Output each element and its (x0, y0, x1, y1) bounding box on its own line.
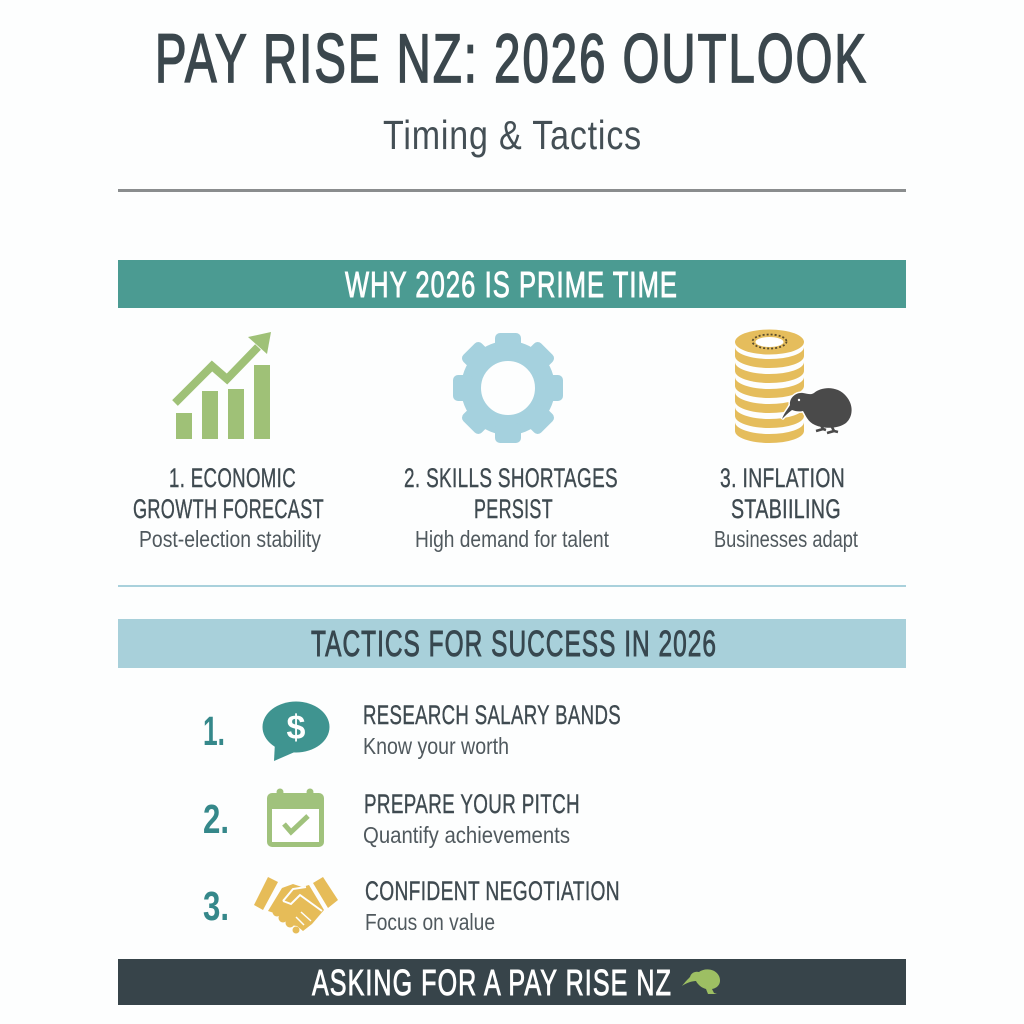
text block: economic growth forecast (133, 463, 324, 552)
text block: economic growth forecast: Post-election stability (139, 526, 321, 552)
icon: green kiwi (682, 969, 720, 994)
text: research salary bands: RESEARCH SALARY BANDS (363, 700, 621, 730)
text block: inflation stabilising (714, 463, 858, 552)
icon: speech bubble with dollar (262, 702, 330, 761)
heading band: why 2026: WHY 2026 IS PRIME TIME (345, 264, 678, 305)
text: prepare your pitch (363, 789, 580, 848)
text: prepare your pitch: PREPARE YOUR PITCH (364, 789, 580, 819)
text block: economic growth forecast: 1. ECONOMIC (169, 463, 296, 493)
tactic 3: confident negotiation (203, 876, 620, 935)
number 3: 3. (203, 883, 229, 929)
heading band: tactics (118, 619, 906, 668)
icon: coin stack with kiwi bird (735, 330, 852, 443)
number 2: 2. (203, 796, 229, 842)
text block: inflation stabilising: STABIILING (731, 494, 841, 524)
tactic 2: prepare your pitch (203, 788, 580, 848)
panel: why 2026 is prime time (118, 260, 906, 552)
text block: skills shortages persist: 2. SKILLS SHORTAGES (404, 463, 618, 493)
text: prepare your pitch: Quantify achievements (363, 822, 570, 848)
footer banner (118, 959, 906, 1005)
icon: gear (453, 333, 563, 443)
text block: skills shortages persist: High demand for talent (415, 526, 610, 552)
subtitle: Timing & Tactics (383, 112, 642, 158)
tactic 1: research salary bands (203, 700, 621, 761)
panel: tactics for success (118, 619, 906, 935)
text: research salary bands (363, 700, 621, 759)
icon: calendar with check (267, 788, 324, 847)
text block: skills shortages persist: PERSIST (474, 494, 553, 524)
heading band: why 2026 (118, 260, 906, 308)
text block: economic growth forecast: GROWTH FORECAST (133, 494, 324, 524)
text: confident negotiation (365, 876, 620, 935)
text: confident negotiation: Focus on value (365, 909, 495, 935)
number 1: 1. (203, 708, 225, 754)
icon: handshake (254, 877, 338, 934)
text block: inflation stabilising: 3. INFLATION (720, 463, 845, 493)
heading band: tactics: TACTICS FOR SUCCESS IN 2026 (311, 623, 717, 664)
icon: speech bubble with dollar: $ (287, 709, 306, 747)
text: research salary bands: Know your worth (363, 733, 509, 759)
text block: inflation stabilising: Businesses adapt (714, 526, 858, 552)
text: confident negotiation: CONFIDENT NEGOTIATION (365, 876, 620, 906)
footer banner: ASKING FOR A PAY RISE NZ (312, 962, 672, 1003)
text block: skills shortages persist (404, 463, 618, 552)
icon: growth bar chart with arrow (175, 332, 271, 439)
